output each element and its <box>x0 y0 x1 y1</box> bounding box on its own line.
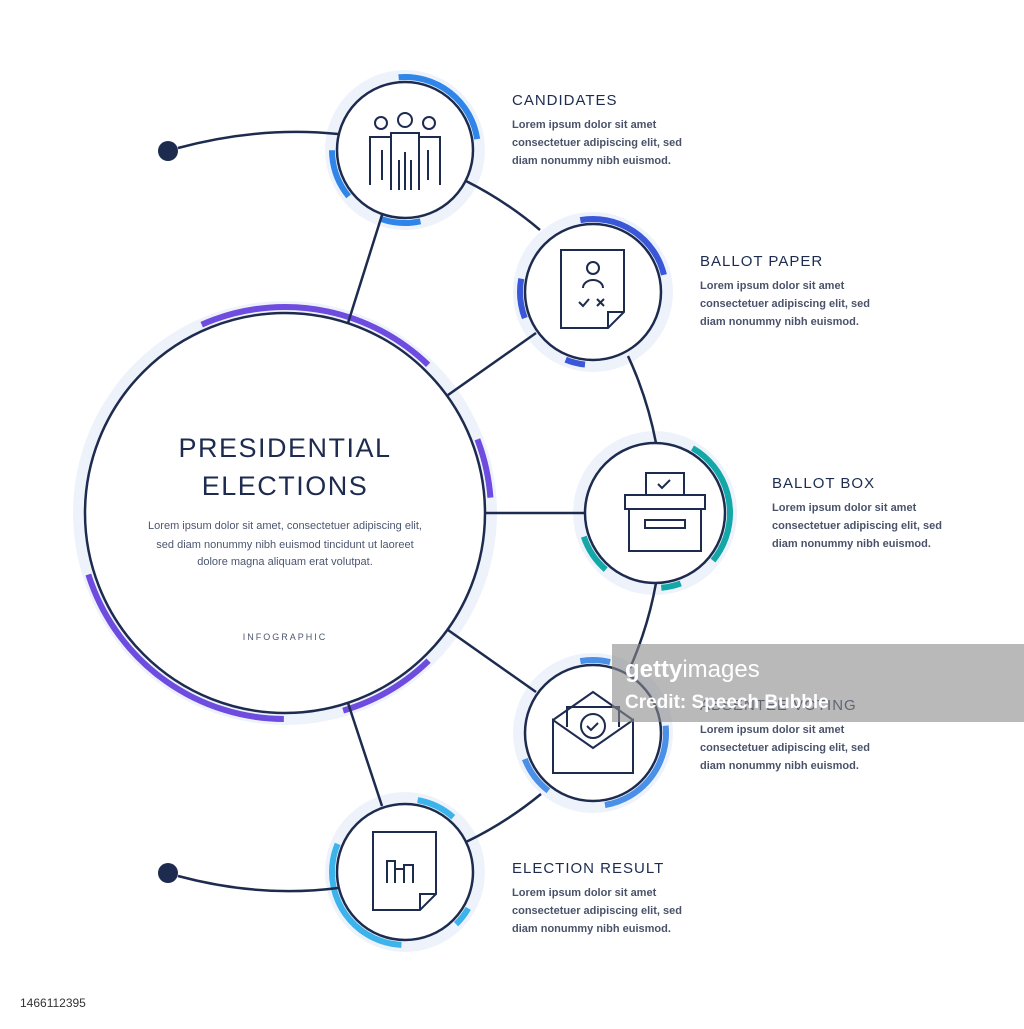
text: ballot box: diam nonummy nibh euismod. <box>772 538 931 550</box>
watermark: Credit: Speech Bubble <box>625 692 829 713</box>
node: candidates <box>325 70 485 230</box>
text: absentee voting: ABSENTEE VOTING <box>700 697 857 714</box>
text: ballot box: consectetuer adipiscing elit, sed <box>772 520 942 532</box>
watermark: gettyimages <box>625 656 760 683</box>
title: PRESIDENTIAL <box>178 433 392 463</box>
text: election result: ELECTION RESULT <box>512 860 664 877</box>
text: ballot paper <box>700 253 870 328</box>
node: ballot box <box>553 411 757 615</box>
dot: top <box>158 141 178 161</box>
watermark <box>612 644 1024 722</box>
node: absentee voting <box>508 648 678 818</box>
connector lines <box>178 132 656 891</box>
text: election result <box>512 860 682 935</box>
text: candidates: consectetuer adipiscing elit, sed <box>512 137 682 149</box>
text: ballot box <box>772 475 942 550</box>
text: election result: consectetuer adipiscing elit, sed <box>512 905 682 917</box>
text: candidates <box>512 92 682 167</box>
text: ballot box: Lorem ipsum dolor sit amet <box>772 502 917 514</box>
dot: bottom <box>158 863 178 883</box>
text: ballot paper: consectetuer adipiscing elit, sed <box>700 298 870 310</box>
text: candidates: diam nonummy nibh euismod. <box>512 155 671 167</box>
text: ballot paper: BALLOT PAPER <box>700 253 823 270</box>
main circle <box>21 249 549 777</box>
main text: sed diam nonummy nibh euismod tincidunt ut laoreet <box>156 539 414 551</box>
node: ballot paper <box>508 207 678 377</box>
text: absentee voting <box>700 697 870 772</box>
main circle: INFOGRAPHIC <box>243 632 327 642</box>
text: election result: diam nonummy nibh euismod. <box>512 923 671 935</box>
main text: dolore magna aliquam erat volutpat. <box>197 556 373 568</box>
text: candidates: CANDIDATES <box>512 92 618 109</box>
image id: 1466112395 <box>20 996 86 1010</box>
node: election result <box>320 787 490 957</box>
main circle: ELECTIONS <box>202 471 368 501</box>
main text: Lorem ipsum dolor sit amet, consectetuer adipiscing elit, <box>148 520 422 532</box>
text: election result: Lorem ipsum dolor sit amet <box>512 887 657 899</box>
text: absentee voting: consectetuer adipiscing elit, sed <box>700 742 870 754</box>
text: ballot box: BALLOT BOX <box>772 475 875 492</box>
main text <box>148 520 422 568</box>
text: ballot paper: Lorem ipsum dolor sit amet <box>700 280 845 292</box>
text: ballot paper: diam nonummy nibh euismod. <box>700 316 859 328</box>
text: candidates: Lorem ipsum dolor sit amet <box>512 119 657 131</box>
text: absentee voting: Lorem ipsum dolor sit amet <box>700 724 845 736</box>
text: absentee voting: diam nonummy nibh euismod. <box>700 760 859 772</box>
